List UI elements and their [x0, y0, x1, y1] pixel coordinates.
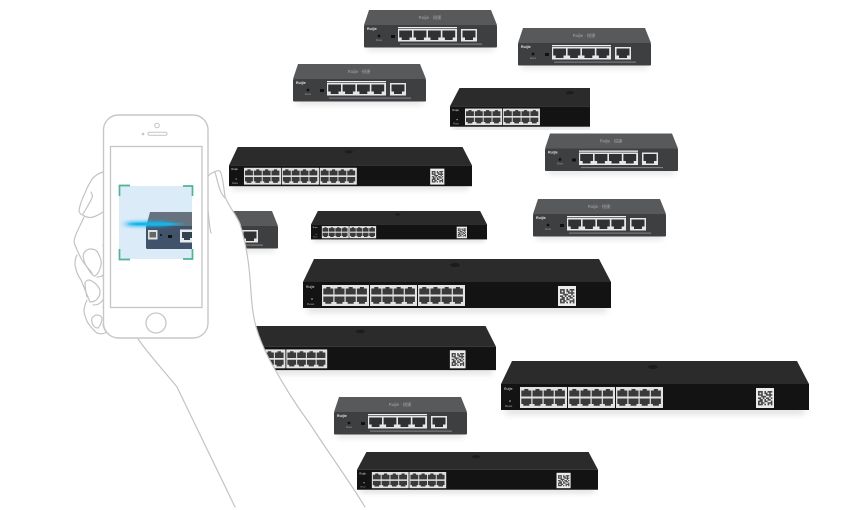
hand holding phone: [72, 171, 365, 507]
finger: ring: [75, 255, 100, 302]
switch: black 16-port, cropped: [450, 88, 590, 130]
index finger and nail: [79, 172, 103, 218]
switch: small gray, lower: [334, 397, 467, 437]
switch: small gray, behind the hand: [145, 211, 278, 251]
finger: little: [84, 300, 109, 334]
scan corner brackets: [120, 186, 192, 260]
switch: small gray, top right: [518, 28, 651, 68]
switch: small gray, upper left: [293, 64, 426, 104]
scanned device: [146, 212, 192, 249]
hand back contour: [74, 217, 92, 273]
phone speaker: [148, 132, 167, 135]
switch: large black, centre: [303, 259, 611, 312]
scan beam: [120, 222, 180, 226]
phone: [104, 115, 208, 338]
switch: small gray, right middle: [533, 199, 666, 239]
hand white fill: [72, 171, 365, 507]
switch: small gray, right: [545, 134, 678, 174]
inner wrist line: [138, 339, 235, 507]
phone body: [104, 115, 208, 338]
phone sensor dot: [142, 133, 144, 135]
switch: small gray, top centre: [364, 10, 497, 50]
switch: black 16-port, bottom: [357, 452, 598, 493]
switch: large black, lower right: [501, 361, 809, 414]
thumb base line: [208, 210, 211, 233]
scan background: [119, 186, 192, 259]
phone screen: [110, 146, 202, 308]
switch: large black, upper: [229, 147, 472, 189]
switch: black 16-port, middle: [311, 211, 487, 242]
phone home button: [146, 313, 166, 333]
switch: black 16-port, behind the hand: [228, 326, 496, 374]
thumb nail: [215, 172, 225, 198]
finger: middle: [83, 249, 101, 276]
scan window: [119, 186, 200, 260]
phone camera: [155, 123, 159, 128]
thumb and outer arm line: [208, 171, 365, 507]
